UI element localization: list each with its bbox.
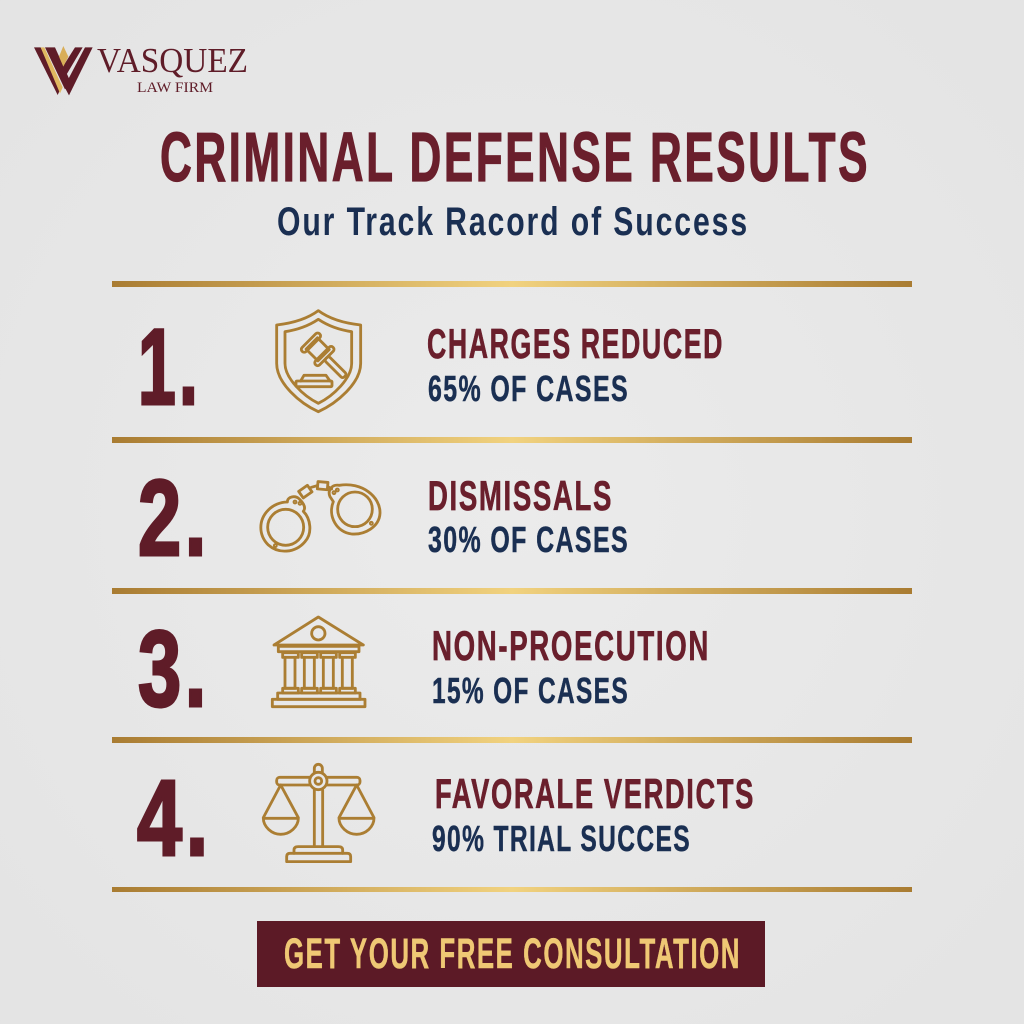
call to action button — [257, 921, 765, 987]
icon: courthouse — [272, 617, 365, 707]
value: 30% OF CASES — [428, 519, 629, 560]
logo name: VASQUEZ — [97, 41, 248, 80]
value: 90% TRIAL SUCCES — [432, 818, 691, 859]
row 1: charges reduced — [138, 306, 724, 427]
number 1: 1. — [138, 306, 201, 427]
icon: scales of justice — [263, 764, 374, 862]
number 4: 4. — [137, 757, 212, 878]
label: DISMISSALS — [428, 472, 613, 519]
gold divider lines — [112, 281, 912, 892]
number 3: 3. — [138, 608, 210, 729]
icon: W monogram — [34, 46, 93, 95]
row 3: non-prosecution — [138, 608, 710, 729]
number 2: 2. — [138, 457, 210, 578]
value: 65% OF CASES — [428, 368, 629, 409]
logo subtitle: LAW FIRM — [137, 80, 213, 96]
label: NON-PROECUTION — [432, 622, 710, 669]
label: FAVORALE VERDICTS — [435, 770, 755, 817]
button text: GET YOUR FREE CONSULTATION — [284, 930, 741, 978]
icon: handcuffs — [261, 482, 380, 551]
icon: shield with gavel — [277, 311, 361, 412]
label: CHARGES REDUCED — [427, 320, 724, 367]
logo: Vasquez Law Firm — [34, 41, 248, 96]
row 4: favorable verdicts — [137, 757, 755, 878]
subtitle: Our Track Racord of Success — [277, 200, 749, 244]
row 2: dismissals — [138, 457, 629, 578]
button background — [257, 921, 765, 987]
value: 15% OF CASES — [432, 670, 629, 711]
